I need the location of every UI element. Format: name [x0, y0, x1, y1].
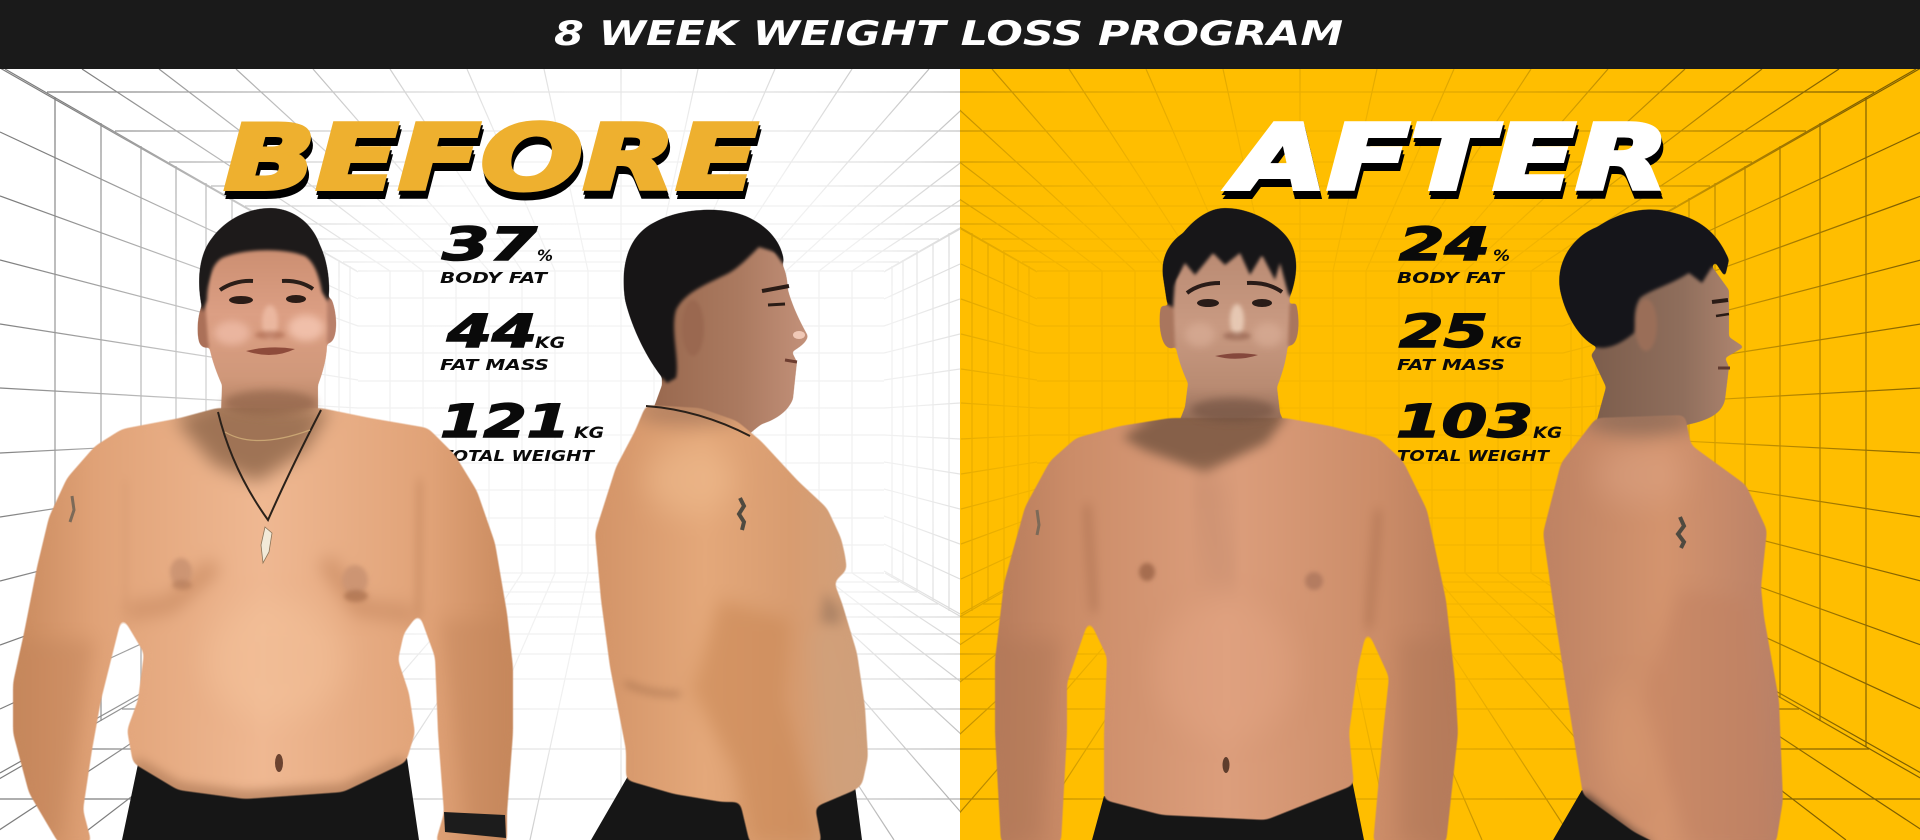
chest details — [170, 558, 192, 586]
panel: after background with perspective grid — [960, 69, 1920, 840]
head — [1160, 208, 1299, 440]
tattoo — [739, 498, 744, 530]
panel: before background with perspective grid — [0, 69, 960, 840]
necklace — [646, 406, 750, 436]
stat: body fat before: % — [537, 246, 553, 265]
stat: fat mass after: FAT MASS — [1397, 356, 1505, 374]
head — [1559, 210, 1744, 445]
tattoo — [70, 496, 74, 522]
heading: AFTER: AFTER — [1226, 110, 1670, 215]
stat: total weight before: 121 — [440, 395, 570, 448]
stat: body fat after: 24 — [1399, 218, 1490, 271]
face details — [1185, 283, 1283, 422]
heading: AFTER: AFTER — [1225, 106, 1669, 211]
stats: after — [1396, 218, 1562, 465]
stat: total weight before: TOTAL WEIGHT — [440, 447, 596, 465]
stat: body fat after — [1397, 218, 1510, 287]
navel — [1222, 757, 1230, 773]
stat: body fat before — [440, 218, 553, 287]
stat: fat mass after: 25 — [1399, 305, 1488, 358]
stats: before — [440, 218, 604, 465]
face details — [214, 281, 324, 416]
stat: body fat before: BODY FAT — [440, 269, 549, 287]
shorts — [1553, 790, 1775, 840]
tattoo — [1678, 517, 1684, 548]
stat: body fat before: 37 — [442, 218, 538, 271]
torso and arms — [13, 400, 513, 840]
watch — [444, 812, 506, 838]
title bar — [0, 0, 1920, 69]
stat: total weight after — [1396, 395, 1562, 465]
head — [198, 208, 336, 440]
stat: fat mass after — [1397, 305, 1522, 374]
face details — [762, 286, 805, 362]
stat: total weight after: TOTAL WEIGHT — [1397, 447, 1551, 465]
stat: fat mass before: 44 — [446, 305, 537, 358]
chest details — [1139, 563, 1155, 581]
figure: before, side view — [591, 210, 868, 840]
heading: AFTER — [1225, 106, 1671, 219]
necklace — [218, 410, 321, 563]
heading: BEFORE: BEFORE — [224, 106, 758, 211]
stat: total weight before: KG — [574, 423, 604, 442]
stat: body fat after: BODY FAT — [1397, 269, 1506, 287]
stat: fat mass before: KG — [535, 333, 565, 352]
figure: before, front view — [13, 208, 513, 840]
heading: BEFORE — [224, 106, 760, 219]
heading: BEFORE: BEFORE — [226, 114, 760, 219]
stat: fat mass before — [440, 305, 565, 374]
torso and arm — [595, 398, 868, 840]
title: 8 WEEK WEIGHT LOSS PROGRAM — [554, 14, 1343, 54]
stat: total weight before — [440, 395, 604, 465]
shorts — [591, 776, 862, 840]
figure: after, front view — [995, 208, 1458, 840]
heading: AFTER: AFTER — [1227, 114, 1671, 219]
head — [624, 210, 808, 445]
stat: fat mass before: FAT MASS — [440, 356, 549, 374]
heading: BEFORE: BEFORE — [225, 110, 759, 215]
tattoo — [1037, 510, 1039, 535]
stat: body fat after: % — [1493, 246, 1510, 265]
shorts — [122, 758, 419, 840]
navel — [275, 754, 283, 772]
figure: after, side view — [1543, 210, 1783, 840]
stat: total weight after: 103 — [1396, 395, 1533, 448]
shorts — [1092, 780, 1364, 840]
face details — [1712, 300, 1730, 368]
stat: fat mass after: KG — [1491, 333, 1522, 352]
torso and arms — [995, 405, 1458, 840]
stat: total weight after: KG — [1533, 423, 1562, 442]
torso and arm — [1543, 404, 1783, 840]
